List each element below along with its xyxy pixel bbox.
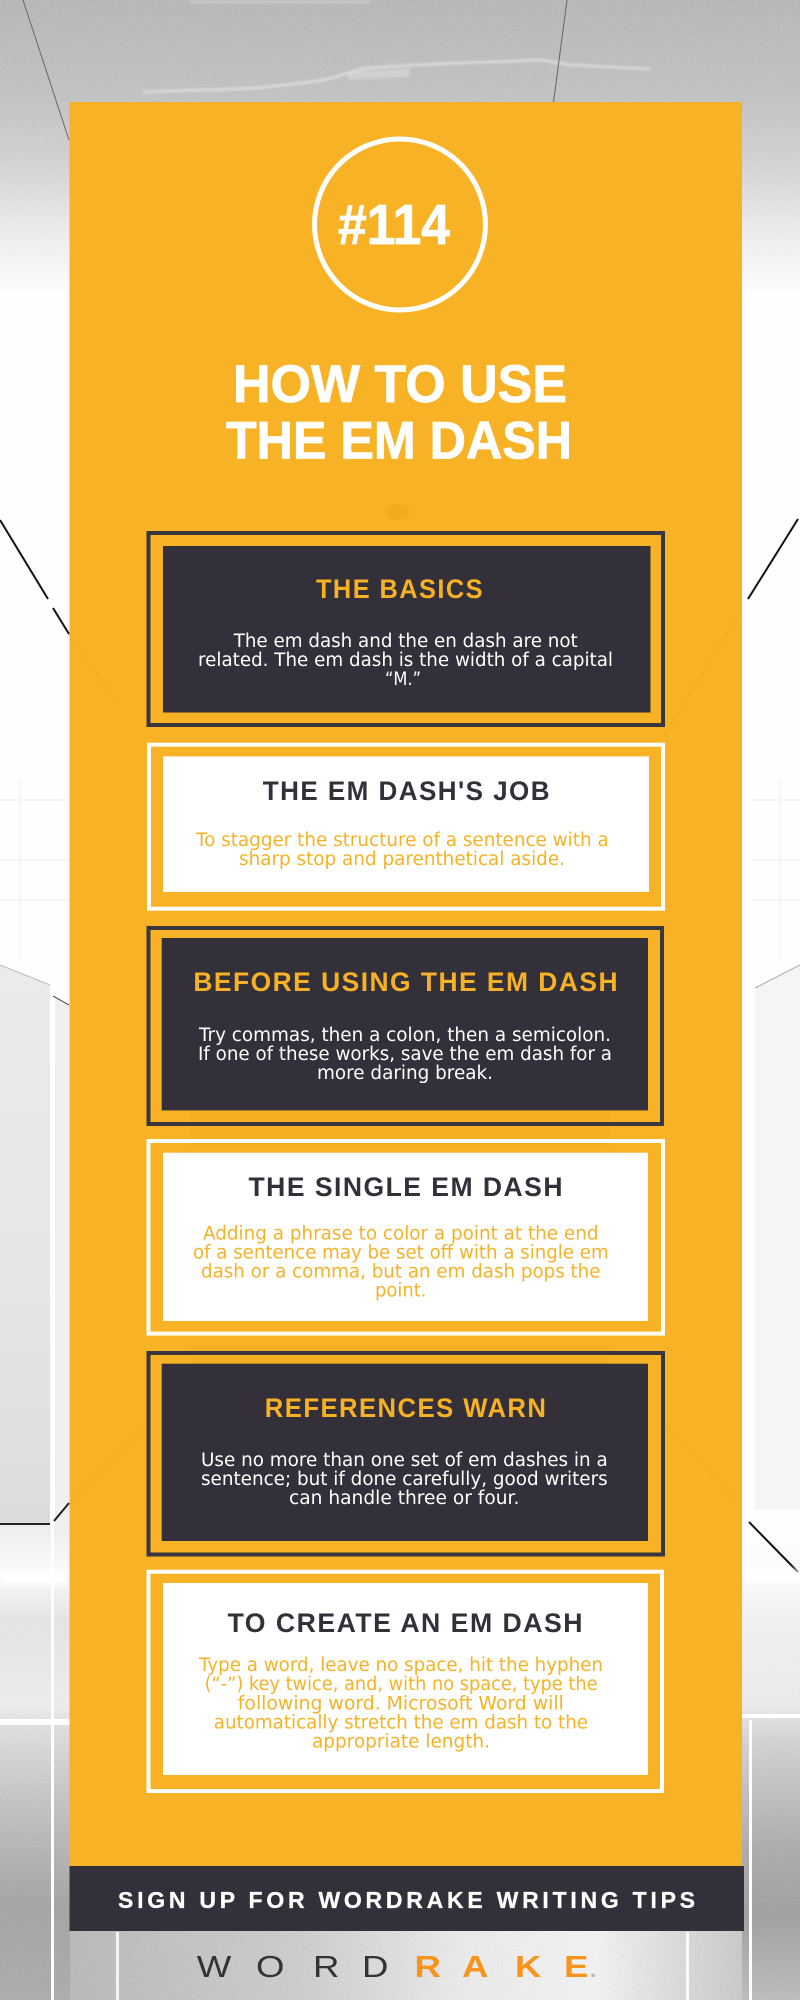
text: create body: following word. Microsoft Word will bbox=[238, 1694, 564, 1714]
heading: to create an em dash: TO CREATE AN EM DASH bbox=[228, 1608, 584, 1638]
text: single em dash body: of a sentence may be set off with a single em bbox=[193, 1242, 609, 1264]
text: create body bbox=[198, 1655, 603, 1753]
text: job body bbox=[195, 830, 609, 870]
text: create body: (“-”) key twice, and, with no space, type the bbox=[205, 1674, 598, 1695]
text: single em dash body bbox=[193, 1223, 609, 1302]
text: job body: To stagger the structure of a sentence with a bbox=[195, 830, 609, 851]
title: HOW TO USE bbox=[233, 355, 567, 414]
heading: references warn: REFERENCES WARN bbox=[265, 1393, 547, 1423]
text: the basics body bbox=[198, 631, 613, 690]
title bbox=[226, 355, 572, 470]
text: create body: appropriate length. bbox=[312, 1732, 490, 1753]
text: before body: more daring break. bbox=[317, 1063, 493, 1084]
panel: the basics bbox=[148, 533, 663, 725]
logo: wordrake: . bbox=[588, 1951, 598, 1984]
logo: wordrake bbox=[197, 1951, 598, 1984]
heading: the single em dash: THE SINGLE EM DASH bbox=[248, 1172, 564, 1202]
logo: wordrake: RAKE bbox=[414, 1951, 588, 1984]
text: references body: sentence; but if done carefully, good writers bbox=[201, 1469, 608, 1490]
text: references body: can handle three or four. bbox=[289, 1488, 519, 1509]
text: references body: Use no more than one set of em dashes in a bbox=[201, 1450, 608, 1471]
panel: to create an em dash bbox=[148, 1572, 662, 1791]
footer bar: sign up call to action: SIGN UP FOR WORDRAKE WRITING TIPS bbox=[118, 1887, 695, 1913]
panel: before using the em dash bbox=[148, 928, 662, 1124]
heading: the basics: THE BASICS bbox=[316, 574, 484, 604]
badge: issue number circle bbox=[314, 139, 486, 310]
panel: the single em dash bbox=[148, 1141, 663, 1334]
text: create body: Type a word, leave no space, hit the hyphen bbox=[198, 1655, 603, 1676]
text: before body: Try commas, then a colon, then a semicolon. bbox=[198, 1025, 611, 1046]
text: job body: sharp stop and parenthetical aside. bbox=[239, 849, 565, 870]
text: the basics body: related. The em dash is the width of a capital bbox=[198, 650, 613, 671]
heading: before using the em dash: BEFORE USING THE EM DASH bbox=[193, 967, 619, 997]
heading: the em dash's job: THE EM DASH'S JOB bbox=[263, 776, 551, 806]
title: THE EM DASH bbox=[226, 412, 572, 470]
text: single em dash body: point. bbox=[375, 1281, 426, 1302]
text: before body: If one of these works, save the em dash for a bbox=[198, 1044, 612, 1065]
footer bar: sign up call to action bbox=[70, 1866, 744, 1931]
text: create body: automatically stretch the em dash to the bbox=[214, 1712, 588, 1734]
text: single em dash body: dash or a comma, but an em dash pops the bbox=[201, 1262, 600, 1282]
text: the basics body: The em dash and the en dash are not bbox=[233, 631, 578, 652]
text: the basics body: “M.” bbox=[385, 669, 421, 690]
badge: issue number circle: #114 bbox=[338, 193, 450, 257]
text: single em dash body: Adding a phrase to color a point at the end bbox=[203, 1223, 598, 1244]
panel: references warn bbox=[148, 1353, 663, 1554]
panel: the em dash's job bbox=[149, 745, 663, 909]
text: before body bbox=[198, 1025, 612, 1084]
panel: yellow main column bbox=[69, 102, 742, 1867]
logo: wordrake: WORD bbox=[197, 1951, 388, 1984]
text: references body bbox=[201, 1450, 608, 1509]
